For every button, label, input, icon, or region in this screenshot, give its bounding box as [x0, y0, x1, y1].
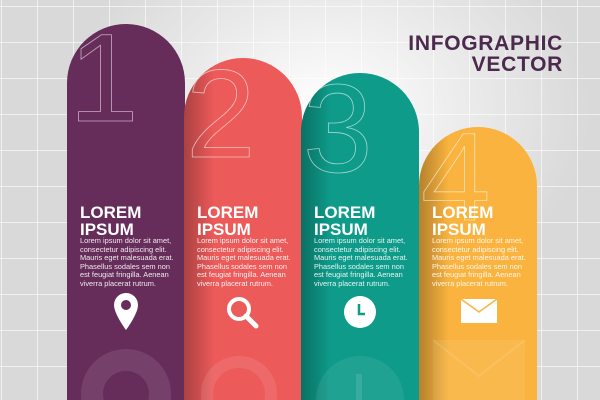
heading 1: LOREM — [80, 203, 141, 222]
heading 4 — [432, 203, 493, 239]
heading 4: IPSUM — [432, 220, 486, 239]
title — [408, 32, 563, 76]
heading 3: LOREM — [314, 203, 375, 222]
panel: step 1 — [67, 24, 185, 400]
text 3: Lorem ipsum dolor sit amet, consectetur adipiscing elit. Mauris eget malesuada erat. Phasellus sodales sem non est feugiat fringilla. Aenean viverra placerat rutrum. — [314, 236, 408, 288]
icon: envelope — [461, 299, 497, 323]
heading 4: LOREM — [432, 203, 493, 222]
panel: step 4 — [419, 127, 537, 400]
panel: step 2 — [184, 58, 302, 400]
icon: location pin — [114, 293, 138, 330]
title: INFOGRAPHIC — [408, 32, 563, 55]
icon: clock — [344, 296, 376, 328]
heading 2: LOREM — [197, 203, 258, 222]
icon: big faded clock — [316, 356, 404, 400]
title: VECTOR — [472, 53, 563, 76]
heading 1: IPSUM — [80, 220, 134, 239]
text 2: Lorem ipsum dolor sit amet, consectetur adipiscing elit. Mauris eget malesuada erat. Phasellus sodales sem non est feugiat fringilla. Aenean viverra placerat rutrum. — [197, 236, 291, 288]
icon: big faded magnifier — [201, 356, 277, 400]
heading 3: IPSUM — [314, 220, 368, 239]
text 4: Lorem ipsum dolor sit amet, consectetur adipiscing elit. Mauris eget malesuada erat. Phasellus sodales sem non est feugiat fringilla. Aenean viverra placerat rutrum. — [432, 236, 526, 288]
heading 2 — [197, 203, 258, 239]
heading 2: IPSUM — [197, 220, 251, 239]
icon: big faded pin — [81, 349, 171, 400]
heading 3 — [314, 203, 375, 239]
icon: magnifier — [227, 297, 258, 328]
text 1: Lorem ipsum dolor sit amet, consectetur adipiscing elit. Mauris eget malesuada erat. Phasellus sodales sem non est feugiat fringilla. Aenean viverra placerat rutrum. — [80, 236, 174, 288]
panel: step 3 — [301, 73, 419, 400]
heading 1 — [80, 203, 141, 239]
icon: big faded envelope — [432, 340, 526, 400]
